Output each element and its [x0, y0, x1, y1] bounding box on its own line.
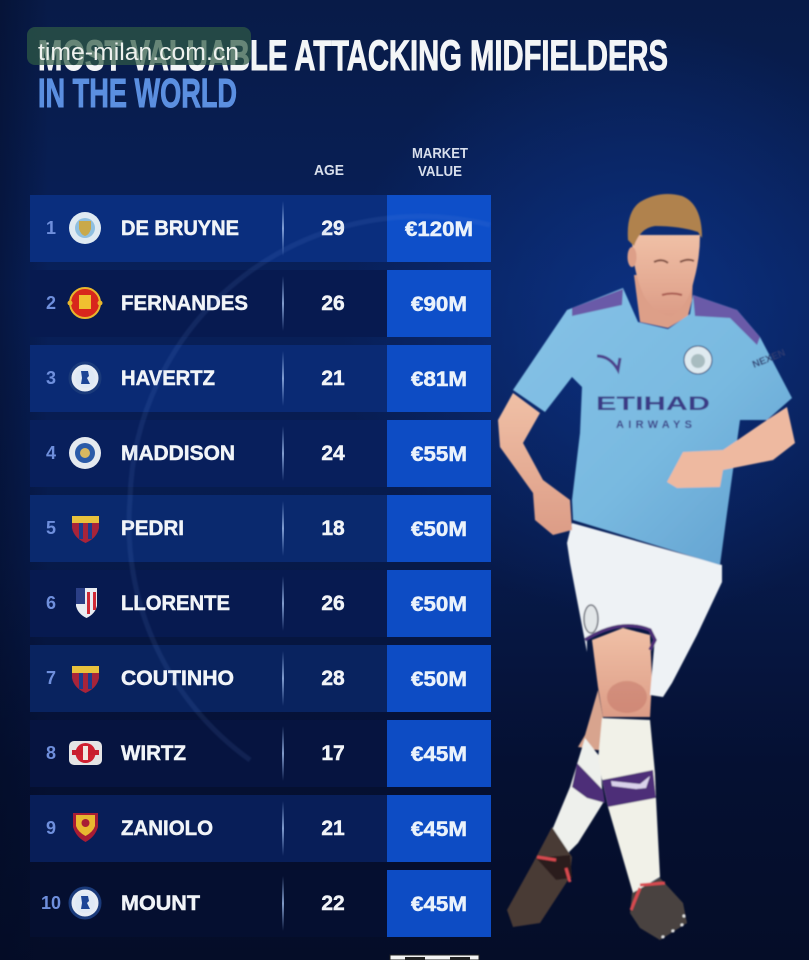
row 9: Zaniolo: 21 — [321, 817, 345, 840]
row 7: Coutinho: 28 — [321, 667, 345, 690]
row 7: Coutinho — [30, 645, 491, 712]
title — [38, 32, 668, 116]
icon: Barcelona badge — [72, 516, 99, 543]
sock logo — [611, 776, 650, 789]
row 9: Zaniolo: ZANIOLO — [121, 817, 213, 840]
icon: Chelsea badge — [69, 362, 101, 394]
shirt — [513, 288, 792, 565]
row 4: Maddison — [30, 420, 491, 487]
watermark: time-milan.com.cn — [38, 39, 239, 66]
row 3: Havertz: €81M — [411, 368, 467, 391]
ranking table — [30, 195, 491, 937]
row 10: Mount — [30, 870, 491, 937]
row 2: Fernandes: 26 — [321, 292, 345, 315]
back sock — [550, 738, 603, 853]
row 4: Maddison: €55M — [411, 443, 467, 466]
row 9: Zaniolo: 9 — [46, 818, 56, 838]
front boot — [630, 878, 687, 940]
back leg — [578, 690, 603, 750]
face details — [654, 260, 694, 295]
source logo — [390, 955, 479, 960]
row 6: Llorente: 26 — [321, 592, 345, 615]
column headers — [314, 145, 468, 180]
row 5: Pedri: 18 — [321, 517, 345, 540]
icon: Atletico Madrid badge — [76, 588, 97, 618]
row 4: Maddison: 4 — [46, 443, 56, 463]
row 8: Wirtz: €45M — [411, 743, 467, 766]
shorts — [567, 523, 722, 697]
shoulder trim — [572, 289, 760, 345]
row 4: Maddison: MADDISON — [121, 442, 235, 465]
row 5: Pedri: €50M — [411, 518, 467, 541]
icon: Chelsea badge — [69, 887, 101, 919]
column headers: VALUE — [418, 163, 462, 180]
sponsor logo: AIRWAYS — [616, 419, 692, 431]
row 3: Havertz: 21 — [321, 367, 345, 390]
row 9: Zaniolo — [30, 795, 491, 862]
row 6: Llorente: €50M — [411, 593, 467, 616]
shirt badge — [684, 346, 712, 374]
icon: Bayer Leverkusen badge — [69, 741, 102, 765]
row 1: De Bruyne: DE BRUYNE — [121, 217, 239, 240]
row 6: Llorente: LLORENTE — [121, 592, 230, 615]
row 1: De Bruyne: 1 — [46, 218, 56, 238]
decorative arc — [129, 216, 490, 760]
back boot — [507, 827, 572, 927]
neck — [634, 275, 693, 328]
watermark — [27, 27, 251, 66]
row 6: Llorente: 6 — [46, 593, 56, 613]
ear — [628, 247, 636, 267]
title: IN THE WORLD — [38, 70, 237, 116]
row 9: Zaniolo: €45M — [411, 818, 467, 841]
icon: Manchester City badge — [69, 212, 101, 244]
right arm — [667, 407, 795, 488]
boot studs — [662, 914, 686, 938]
front sock — [598, 718, 660, 893]
row 7: Coutinho: €50M — [411, 668, 467, 691]
row 3: Havertz: 3 — [46, 368, 56, 388]
puma logo — [597, 356, 620, 370]
illustration: footballer — [498, 194, 795, 940]
sponsor logo: ETIHAD — [596, 394, 710, 415]
row 5: Pedri — [30, 495, 491, 562]
head — [632, 235, 700, 316]
row 5: Pedri: PEDRI — [121, 517, 184, 540]
row 10: Mount: 22 — [321, 892, 345, 915]
row 2: Fernandes: €90M — [411, 293, 467, 316]
row 10: Mount: MOUNT — [121, 892, 200, 915]
row 10: Mount: 10 — [41, 893, 61, 913]
icon: Leicester City badge — [69, 437, 101, 469]
left arm — [498, 393, 572, 535]
row 7: Coutinho: 7 — [46, 668, 56, 688]
sleeve sponsor: NEXEN — [751, 348, 787, 371]
row 3: Havertz: HAVERTZ — [121, 367, 215, 390]
row 1: De Bruyne: 29 — [321, 217, 345, 240]
row 8: Wirtz: WIRTZ — [121, 742, 186, 765]
column headers: AGE — [314, 162, 344, 179]
row 8: Wirtz: 8 — [46, 743, 56, 763]
row 5: Pedri: 5 — [46, 518, 56, 538]
row 1: De Bruyne: €120M — [405, 218, 473, 241]
row 4: Maddison: 24 — [321, 442, 345, 465]
icon: AS Roma badge — [73, 813, 98, 842]
row 2: Fernandes — [30, 270, 491, 337]
hair — [628, 194, 702, 246]
row 8: Wirtz: 17 — [321, 742, 345, 765]
row 7: Coutinho: COUTINHO — [121, 667, 234, 690]
row 1: De Bruyne — [30, 195, 491, 262]
row 3: Havertz — [30, 345, 491, 412]
row 2: Fernandes: 2 — [46, 293, 56, 313]
column headers: MARKET — [412, 145, 468, 162]
sponsor logo — [596, 394, 710, 431]
row 8: Wirtz — [30, 720, 491, 787]
row 10: Mount: €45M — [411, 893, 467, 916]
icon: Manchester United badge — [68, 288, 102, 318]
row 6: Llorente — [30, 570, 491, 637]
thigh — [592, 628, 652, 717]
row 2: Fernandes: FERNANDES — [121, 292, 248, 315]
icon: Barcelona badge — [72, 666, 99, 693]
